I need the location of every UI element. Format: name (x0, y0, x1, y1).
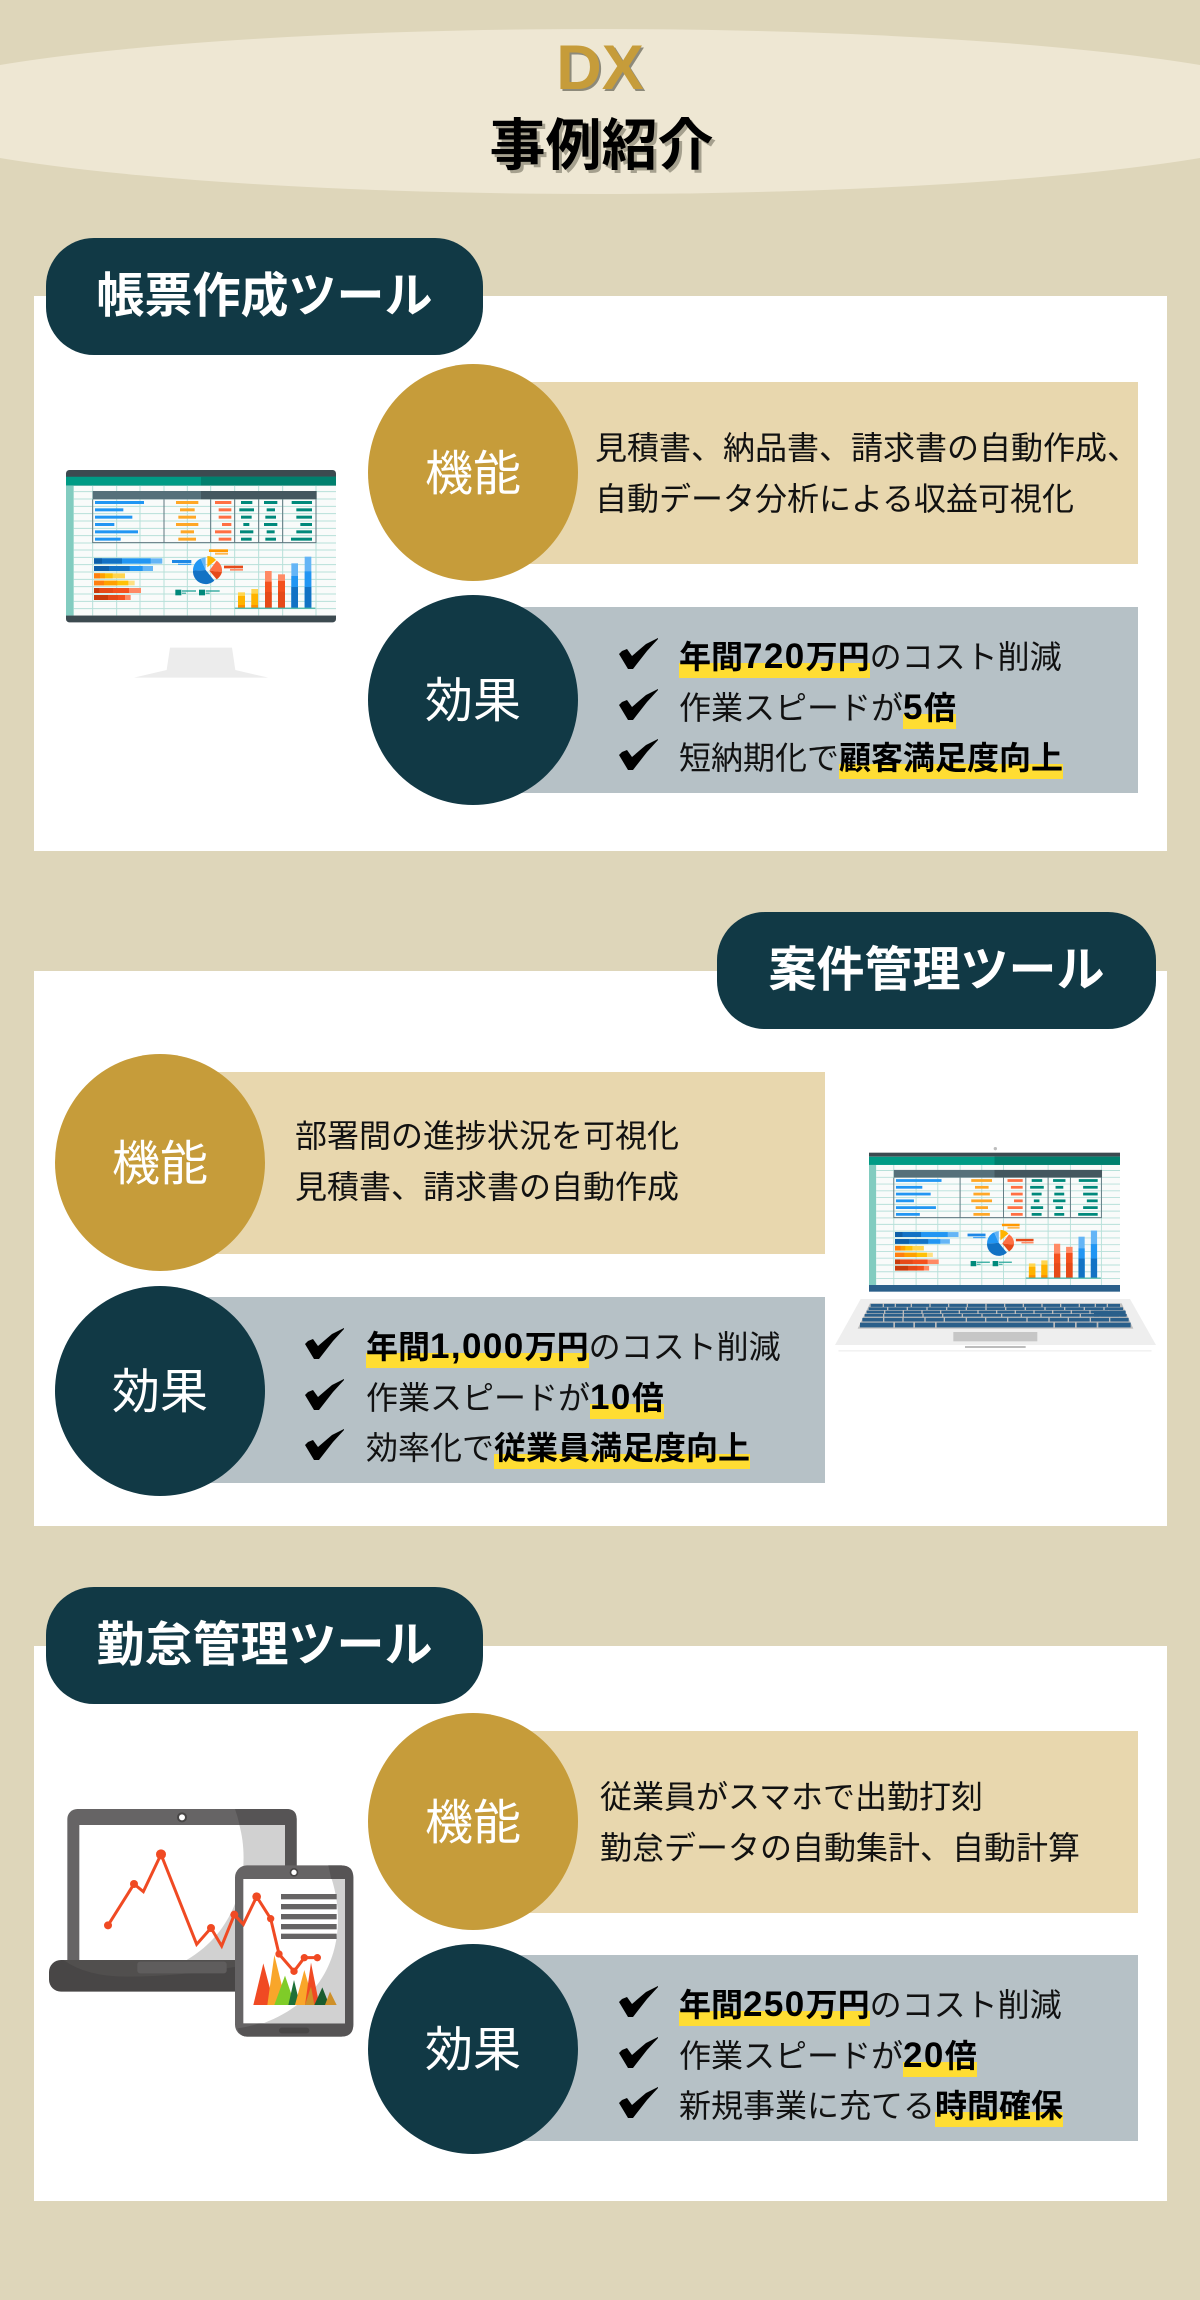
effect item: time: 新規事業に充てる (679, 2088, 935, 2124)
icon: laptop and tablet with charts (49, 1809, 354, 2037)
effect item: satisfaction: 顧客満足度向上 (839, 740, 1063, 776)
effect circle: 効果 (425, 2010, 521, 2080)
feature circle: 機能 (425, 434, 521, 504)
effect row (55, 1286, 825, 1496)
heading: 事例紹介: 事例紹介 (490, 114, 714, 177)
heading pill: 帳票作成ツール (96, 270, 432, 323)
feature band (115, 1072, 825, 1254)
effect row (368, 595, 1138, 805)
icon: laptop with spreadsheet (835, 1147, 1156, 1352)
feature row (368, 1713, 1138, 1930)
effect row (368, 1944, 1138, 2154)
effect list (619, 637, 1063, 779)
panel: 勤怠管理ツール (34, 1587, 1167, 2201)
feature text: 見積書、納品書、請求書の自動作成、 (595, 430, 1139, 466)
feature text: 自動データ分析による収益可視化 (595, 480, 1074, 516)
effect item: cost: のコスト削減 (589, 1329, 781, 1365)
feature band (428, 382, 1138, 564)
feature text: 見積書、請求書の自動作成 (295, 1168, 679, 1204)
effect item: satisfaction (619, 739, 1063, 779)
feature text: 部署間の進捗状況を可視化 (295, 1118, 679, 1154)
effect item: satisfaction: 短納期化で (679, 740, 839, 776)
heading pill (46, 238, 483, 355)
panel background (34, 1646, 1167, 2201)
feature text (595, 430, 1139, 516)
feature circle (55, 1054, 265, 1271)
effect item: speed: 作業スピードが (679, 2038, 903, 2074)
heading pill: 勤怠管理ツール (96, 1619, 432, 1672)
effect item: cost: のコスト削減 (870, 1987, 1062, 2023)
effect item: cost (619, 637, 1062, 678)
feature row (55, 1054, 825, 1271)
feature band (428, 1731, 1138, 1913)
effect circle: 効果 (425, 661, 521, 731)
effect item: speed (619, 688, 956, 729)
icon: desktop monitor with spreadsheet (66, 470, 336, 678)
effect item: cost: 年間1,000万円 (366, 1327, 589, 1366)
feature text: 勤怠データの自動集計、自動計算 (600, 1830, 1080, 1866)
effect circle (368, 595, 578, 805)
effect band (428, 1955, 1138, 2141)
effect item: speed (619, 2036, 977, 2077)
effect item: speed: 作業スピードが (679, 690, 903, 726)
panel: 帳票作成ツール (34, 238, 1167, 851)
feature text: 従業員がスマホで出勤打刻 (600, 1779, 983, 1815)
effect band (428, 607, 1138, 793)
feature circle: 機能 (112, 1124, 208, 1194)
panel: 案件管理ツール (34, 912, 1167, 1526)
feature row (368, 364, 1139, 581)
heading: DX: DX (556, 33, 644, 103)
effect list (305, 1327, 781, 1469)
effect item: cost: のコスト削減 (870, 639, 1062, 675)
effect item: cost (619, 1985, 1062, 2026)
effect item: speed: 5倍 (903, 688, 956, 727)
heading pill (717, 912, 1156, 1029)
effect list (619, 1985, 1063, 2127)
heading pill (46, 1587, 483, 1704)
effect item: speed: 10倍 (590, 1378, 664, 1417)
effect item: time: 時間確保 (935, 2088, 1063, 2124)
effect item: satisfaction: 従業員満足度向上 (494, 1430, 750, 1466)
effect item: cost: 年間250万円 (679, 1985, 870, 2024)
effect item: time (619, 2087, 1063, 2127)
effect item: cost (305, 1327, 781, 1368)
feature circle: 機能 (425, 1783, 521, 1853)
effect band (115, 1297, 825, 1483)
effect item: speed (305, 1378, 664, 1419)
effect circle (368, 1944, 578, 2154)
effect circle (55, 1286, 265, 1496)
feature text (295, 1118, 679, 1204)
banner ellipse (0, 29, 1200, 194)
panel background (34, 971, 1167, 1526)
effect item: satisfaction: 効率化で (366, 1430, 494, 1466)
effect circle: 効果 (112, 1352, 208, 1422)
effect item: satisfaction (305, 1429, 750, 1469)
title banner (0, 29, 1200, 194)
feature circle (368, 364, 578, 581)
effect item: speed: 20倍 (903, 2036, 977, 2075)
feature text (600, 1779, 1080, 1866)
panel background (34, 296, 1167, 851)
effect item: speed: 作業スピードが (366, 1380, 590, 1416)
feature circle (368, 1713, 578, 1930)
effect item: cost: 年間720万円 (679, 637, 870, 676)
heading pill: 案件管理ツール (768, 944, 1104, 997)
